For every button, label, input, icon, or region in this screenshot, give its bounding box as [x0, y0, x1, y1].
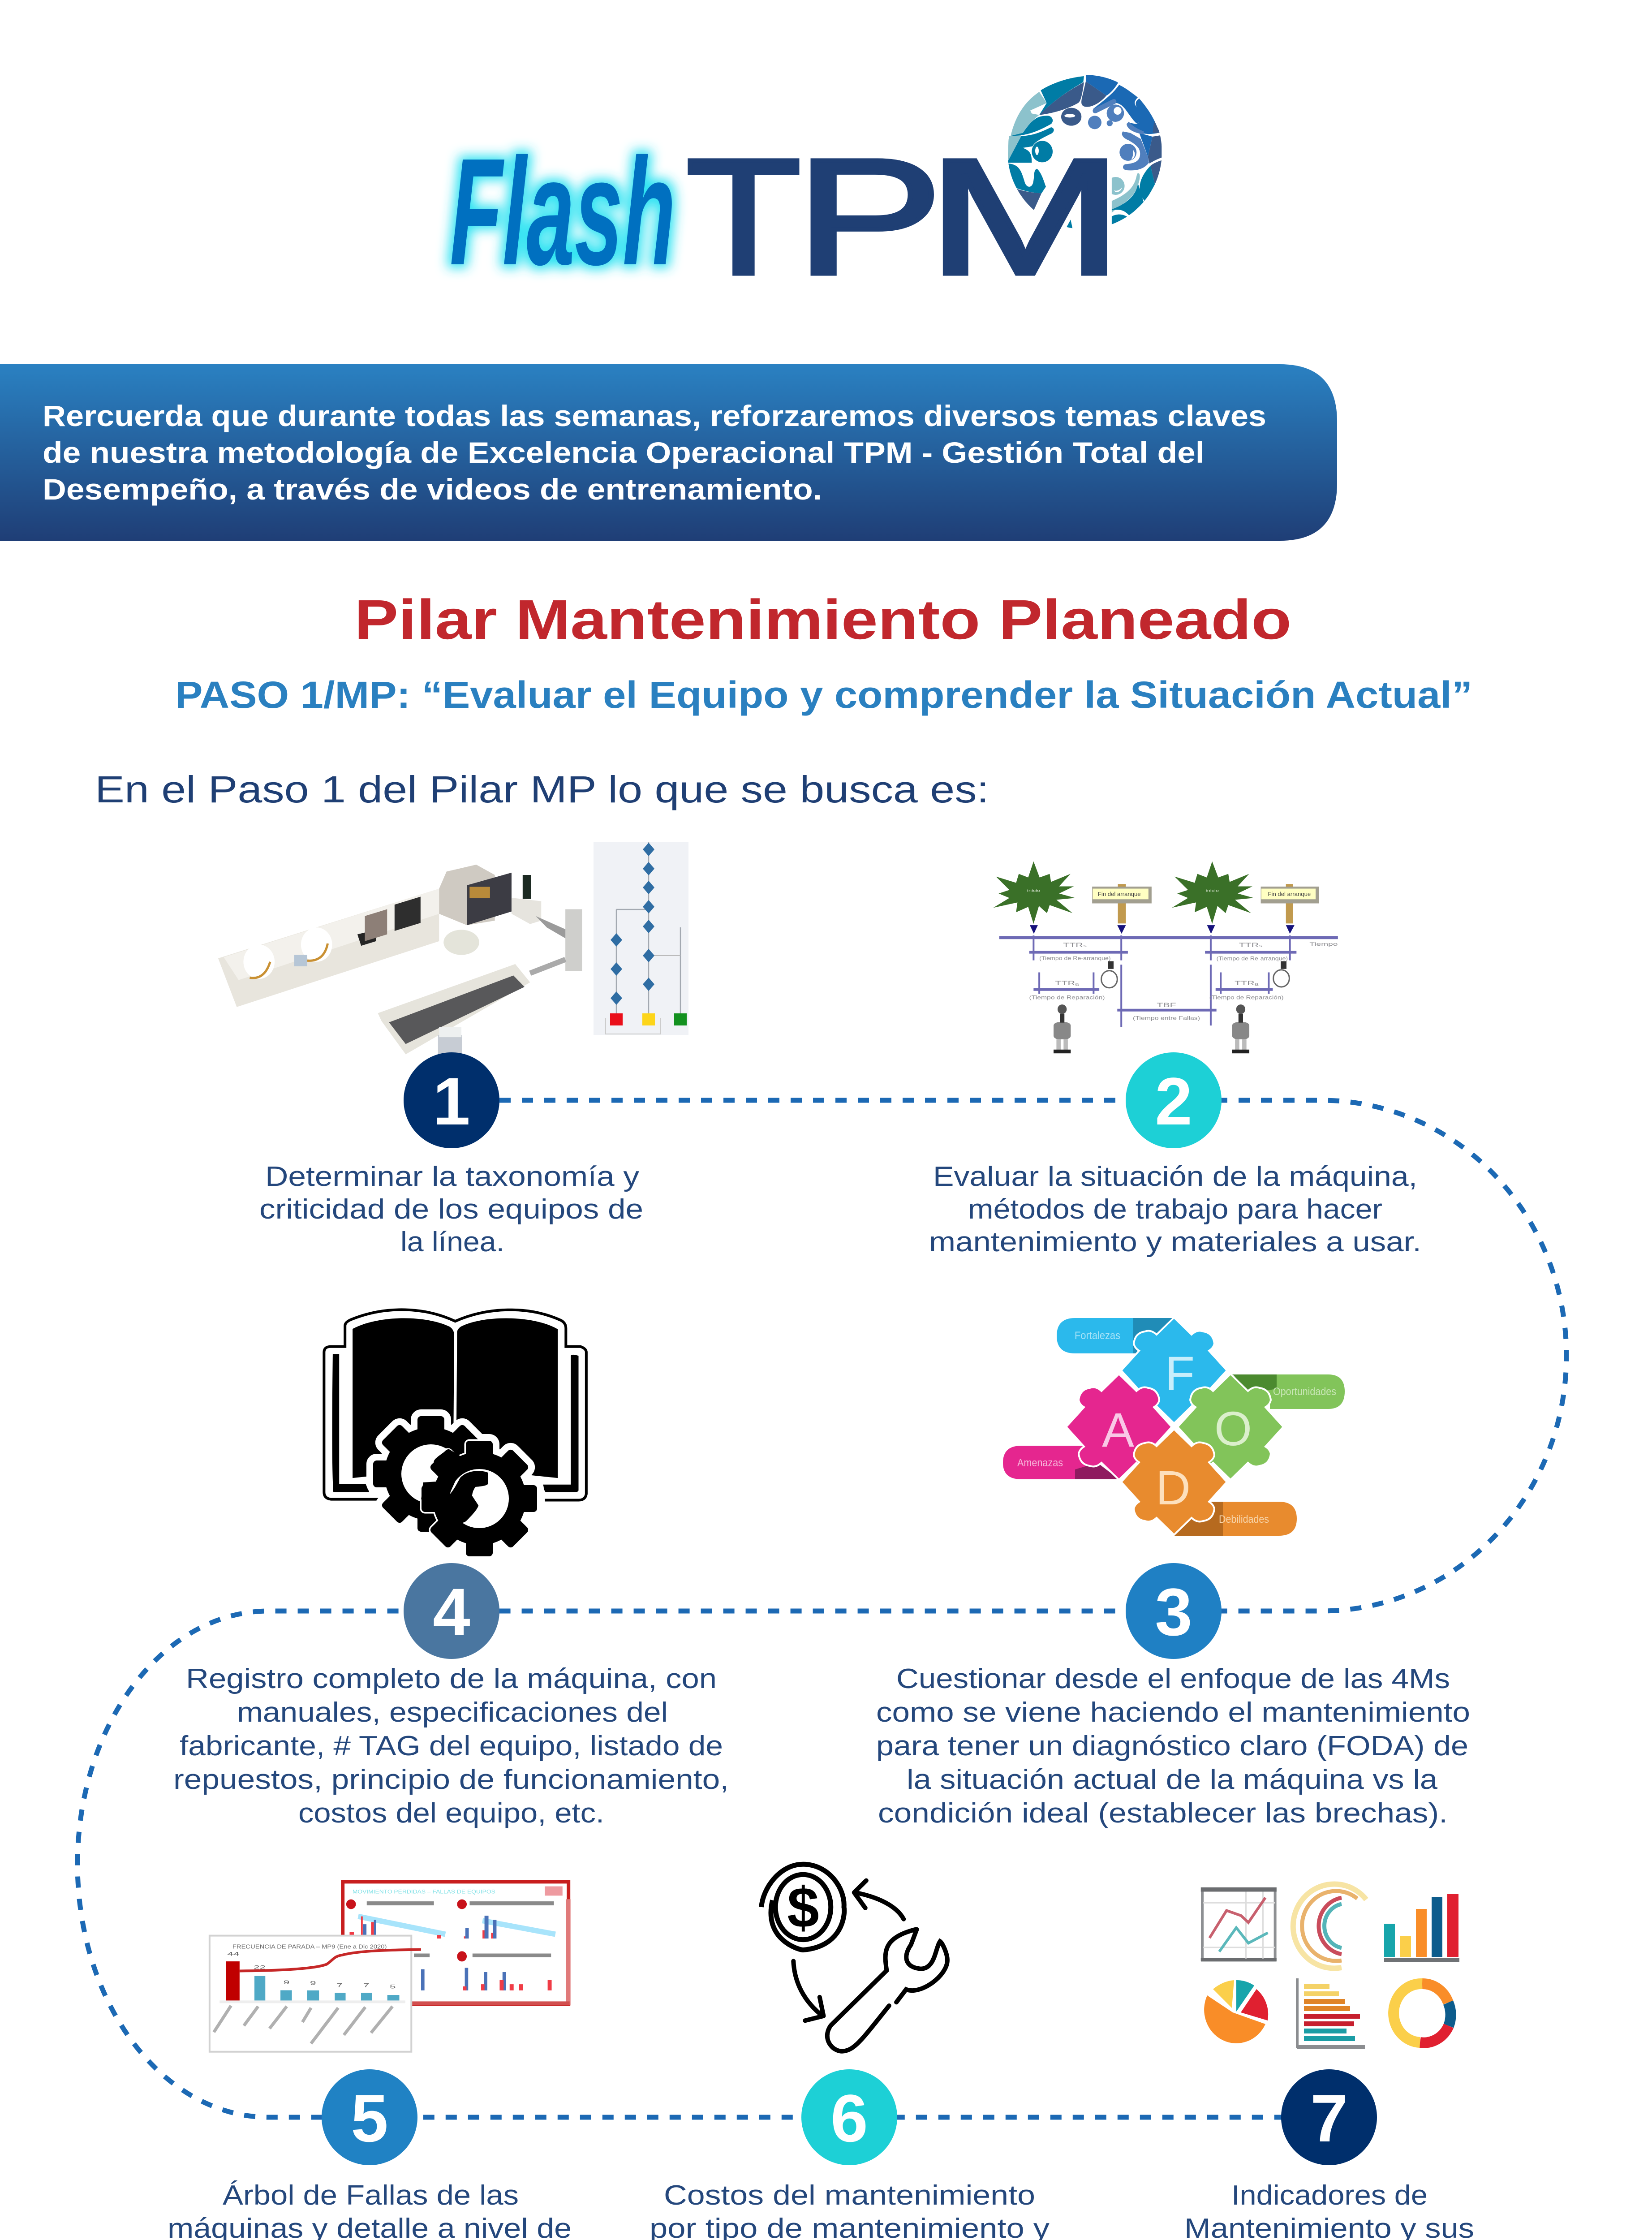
- banner text: de nuestra metodología de Excelencia Operacional TPM - Gestión Total del: [43, 436, 1205, 469]
- FODA pill labels: Debilidades: [1219, 1513, 1269, 1525]
- back report panel: [343, 1882, 571, 2005]
- coin: $: [787, 1876, 819, 1940]
- donut chart icon: [1394, 1984, 1451, 2043]
- banner text: Desempeño, a través de videos de entrenamiento.: [43, 473, 822, 506]
- step 4 text: [173, 1663, 729, 1829]
- step 6 text: [650, 2180, 1050, 2240]
- FODA pieces: [1066, 1318, 1283, 1535]
- front frequency bar chart: 44: [227, 1951, 240, 1957]
- failure bursts: Inicio: [1205, 889, 1219, 893]
- FODA letters: D: [1156, 1460, 1191, 1515]
- interval labels: TTRₐ: [1055, 980, 1080, 987]
- front frequency bar chart: 7: [336, 1982, 343, 1989]
- technician figures: [1054, 961, 1289, 1053]
- front frequency bar chart: 9: [310, 1981, 316, 1986]
- step 7 text: Indicadores de: [1231, 2180, 1428, 2211]
- front frequency bar chart: 5: [390, 1984, 396, 1990]
- title: Pilar Mantenimiento Planeado: [354, 589, 1291, 651]
- step 4 marker: [404, 1563, 499, 1659]
- interval labels: TTRₛ: [1063, 942, 1087, 949]
- production line: [218, 865, 582, 1054]
- interval labels: (Tiempo de Re-arranque): [1217, 956, 1288, 962]
- pie chart icon: [1204, 1980, 1268, 2043]
- image 4: manual book with gears icon: [324, 1310, 586, 1556]
- coin: [761, 1864, 844, 1950]
- logo word TPM: M: [926, 125, 1123, 309]
- FODA letters: F: [1165, 1346, 1195, 1400]
- red callout arrow: [240, 1950, 421, 1971]
- step 3 text: para tener un diagnóstico claro (FODA) de: [876, 1731, 1468, 1762]
- step 2 text: mantenimiento y materiales a usar.: [929, 1227, 1421, 1258]
- column chart icon: [1384, 1894, 1459, 1962]
- step 3 text: como se viene haciendo el mantenimiento: [876, 1697, 1470, 1728]
- step 6 marker: 6: [830, 2081, 868, 2156]
- front frequency bar chart: 22: [254, 1965, 266, 1971]
- step 1 text: la línea.: [400, 1227, 504, 1258]
- interval labels: [1029, 942, 1338, 1021]
- book: [324, 1310, 586, 1500]
- banner: [0, 364, 1337, 541]
- step 1 text: [259, 1161, 643, 1258]
- step 4 text: costos del equipo, etc.: [298, 1798, 604, 1829]
- logo word TPM: M: [926, 125, 1123, 309]
- step 4 marker: 4: [433, 1574, 470, 1650]
- front frequency bar chart: 9: [284, 1980, 289, 1986]
- step 2 text: [929, 1161, 1421, 1258]
- horizontal bars icon: [1296, 1978, 1365, 2049]
- image 1: production line and criticality diagram: [218, 842, 688, 1054]
- interval labels: TBF: [1157, 1002, 1176, 1009]
- step 3 text: Cuestionar desde el enfoque de las 4Ms: [896, 1663, 1450, 1694]
- step 4 text: manuales, especificaciones del: [237, 1697, 668, 1728]
- logo word TPM: T: [686, 125, 801, 309]
- step 1 text: criticidad de los equipos de: [259, 1194, 643, 1225]
- step 2 text: Evaluar la situación de la máquina,: [933, 1161, 1417, 1192]
- logo: Flash TPM: [450, 75, 1163, 309]
- step 7 text: [1184, 2180, 1474, 2240]
- criticality decision diagram: [594, 842, 688, 1035]
- step 7 marker: 7: [1310, 2081, 1348, 2156]
- front frequency bar chart: FRECUENCIA DE PARADA – MP9 (Ene a Dic 2020): [232, 1944, 387, 1950]
- interval labels: TTRₐ: [1235, 980, 1259, 987]
- FODA letters: O: [1214, 1401, 1252, 1456]
- image 5: failure tree charts: [210, 1882, 571, 2052]
- step 2 marker: [1126, 1052, 1222, 1148]
- FODA pill labels: Oportunidades: [1273, 1386, 1336, 1398]
- image 2: failure timeline diagram: [993, 862, 1338, 1053]
- logo word Flash: Flash: [450, 127, 675, 297]
- gears: [373, 1416, 537, 1556]
- step 5 text: Árbol de Fallas de las: [223, 2180, 519, 2211]
- step 5 marker: 5: [351, 2081, 388, 2156]
- interval labels: (Tiempo entre Fallas): [1133, 1015, 1200, 1021]
- step 3 text: la situación actual de la máquina vs la: [907, 1764, 1438, 1795]
- interval labels: Tiempo: [1309, 942, 1338, 947]
- FODA pill labels: [1017, 1330, 1336, 1525]
- step 2 marker: 2: [1155, 1064, 1192, 1139]
- end-of-repair signs: Fin del arranque: [1098, 891, 1141, 897]
- line chart icon: [1201, 1887, 1277, 1961]
- step 1 marker: 1: [433, 1064, 470, 1139]
- end-of-repair signs: [1092, 884, 1319, 923]
- interval labels: (Tiempo de Reparación): [1209, 995, 1284, 1000]
- dashed connector path: [77, 1100, 1566, 2117]
- axis arrows: [1030, 925, 1295, 934]
- banner text: Rercuerda que durante todas las semanas, reforzaremos diversos temas claves: [43, 399, 1266, 432]
- FODA pill labels: Amenazas: [1017, 1457, 1063, 1469]
- step 5 text: [168, 2180, 572, 2240]
- logo globe: [1008, 75, 1163, 230]
- step 2 text: métodos de trabajo para hacer: [968, 1194, 1382, 1225]
- image 6: cost and wrench icon: [761, 1864, 947, 2051]
- step 3 text: [876, 1663, 1470, 1829]
- wrench: [827, 1930, 947, 2051]
- FODA letters: [1102, 1346, 1252, 1515]
- step 1 text: Determinar la taxonomía y: [265, 1161, 639, 1192]
- banner text: [43, 399, 1266, 506]
- front frequency bar chart: 7: [363, 1982, 369, 1989]
- end-of-repair signs: Fin del arranque: [1268, 891, 1311, 897]
- interval labels: (Tiempo de Re-arranque): [1039, 955, 1111, 961]
- step 3 marker: 3: [1155, 1574, 1192, 1650]
- front frequency bar chart: [210, 1936, 411, 2052]
- step 4 text: Registro completo de la máquina, con: [186, 1663, 717, 1694]
- interval labels: (Tiempo de Reparación): [1029, 995, 1105, 1000]
- interval labels: TTRₛ: [1239, 942, 1263, 949]
- subtitle: PASO 1/MP: “Evaluar el Equipo y comprender la Situación Actual”: [175, 674, 1472, 716]
- FODA pill labels: Fortalezas: [1075, 1330, 1120, 1342]
- step 4 text: repuestos, principio de funcionamiento,: [173, 1764, 729, 1795]
- step 7 marker: [1281, 2069, 1377, 2165]
- step 6 text: Costos del mantenimiento: [664, 2180, 1035, 2211]
- failure bursts: Inicio: [1027, 889, 1040, 893]
- FODA letters: A: [1102, 1403, 1134, 1457]
- step 4 text: fabricante, # TAG del equipo, listado de: [180, 1731, 723, 1762]
- logo word TPM: P: [795, 125, 943, 309]
- step 1 marker: [404, 1052, 499, 1148]
- intro heading: En el Paso 1 del Pilar MP lo que se busca es:: [95, 768, 989, 810]
- concentric arcs icon: [1293, 1884, 1366, 1968]
- back report panel: MOVIMIENTO PÉRDIDAS – FALLAS DE EQUIPOS: [353, 1889, 495, 1895]
- failure bursts: [993, 862, 1254, 924]
- logo word TPM: [686, 125, 1123, 309]
- step 3 marker: [1126, 1563, 1222, 1659]
- image 3: FODA puzzle: [1003, 1318, 1345, 1536]
- FODA pills: [1003, 1318, 1345, 1536]
- time axis and intervals: [999, 935, 1338, 1027]
- step 5 marker: [322, 2069, 417, 2165]
- image 7: indicator chart icons: [1201, 1884, 1459, 2049]
- step 3 text: condición ideal (establecer las brechas).: [878, 1798, 1448, 1829]
- step 6 marker: [801, 2069, 897, 2165]
- circular arrows: [793, 1881, 903, 2020]
